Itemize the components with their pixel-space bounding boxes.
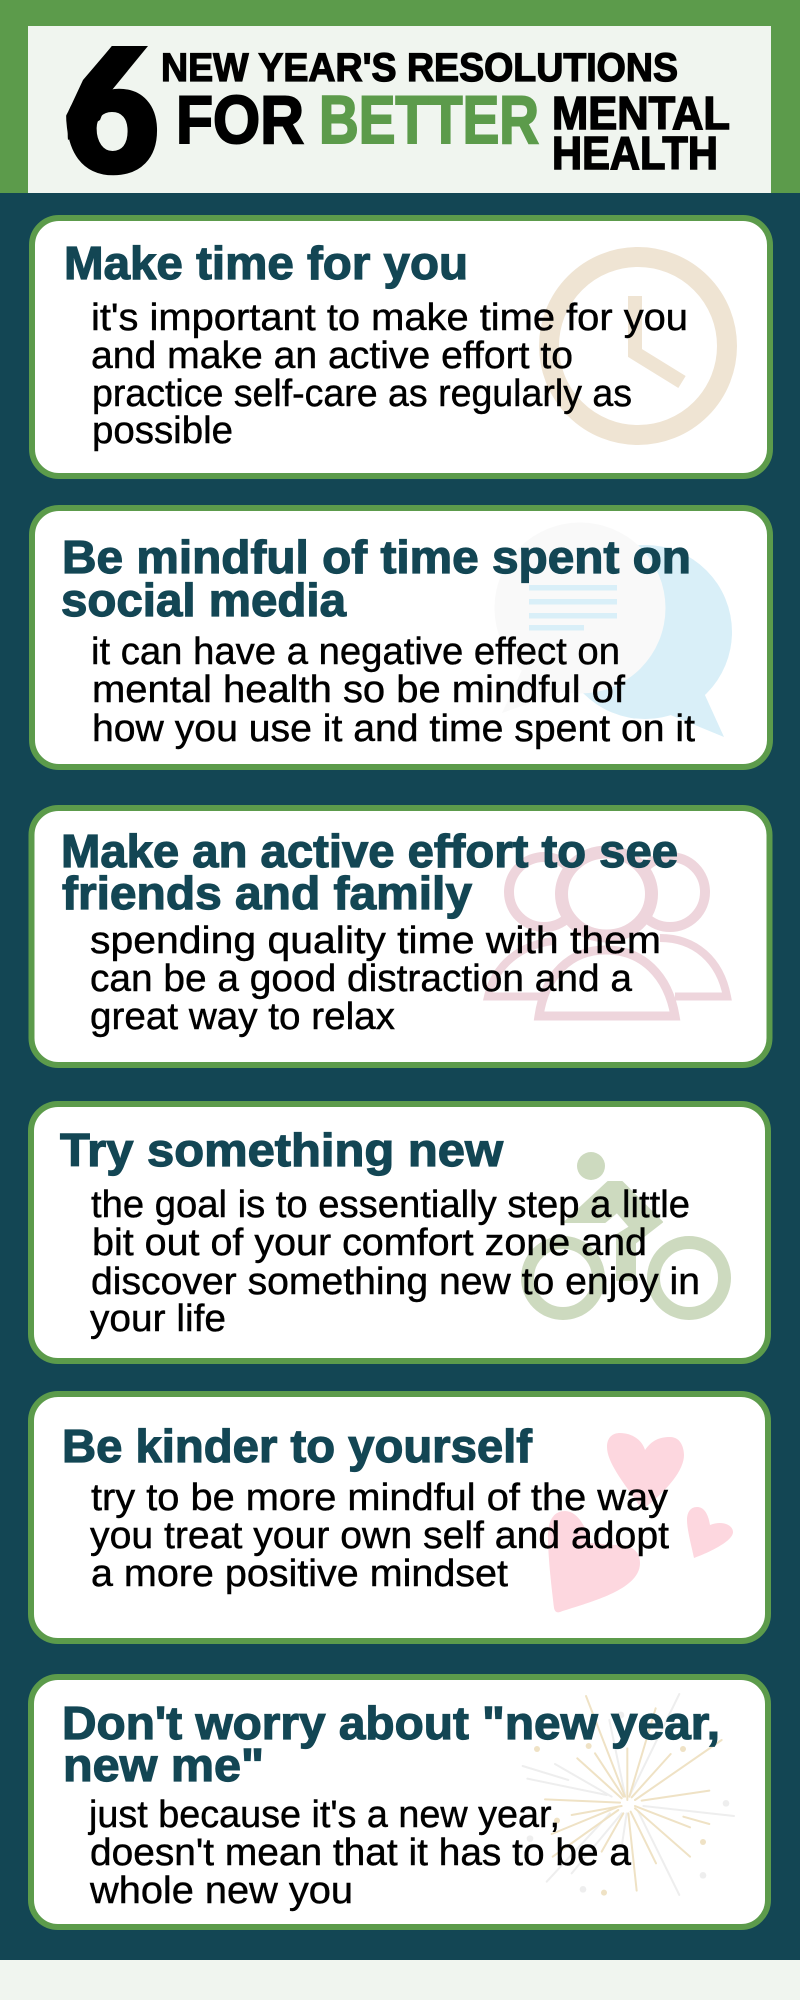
icon: hearts bbox=[548, 1433, 733, 1612]
body: new year new me: just because it's a new year, bbox=[88, 1794, 560, 1836]
body: new year new me: whole new you bbox=[89, 1870, 353, 1912]
body: social media: how you use it and time spent on it bbox=[92, 708, 695, 750]
title: new year's resolutions: NEW YEAR'S RESOLUTIONS bbox=[161, 46, 678, 90]
body: friends and family: spending quality time with them bbox=[90, 920, 661, 962]
title: mental: MENTAL bbox=[552, 87, 730, 139]
panel: try something new bbox=[31, 1104, 768, 1361]
body: be kinder to yourself: a more positive mindset bbox=[91, 1553, 508, 1595]
heading: social media: social media bbox=[61, 574, 346, 626]
body: try something new: your life bbox=[90, 1298, 226, 1340]
panel: be kinder to yourself bbox=[31, 1394, 768, 1641]
body: try something new: discover something new to enjoy in bbox=[91, 1261, 700, 1303]
body: make time for you bbox=[91, 297, 688, 452]
body: new year new me bbox=[88, 1794, 632, 1912]
body: make time for you: practice self-care as regularly as bbox=[92, 373, 632, 415]
icon: speech bubbles bbox=[494, 522, 732, 737]
panel: friends and family bbox=[32, 808, 770, 1065]
icon: people bbox=[488, 852, 727, 1016]
heading: new year new me bbox=[62, 1697, 720, 1791]
body: social media: it can have a negative effect on bbox=[91, 631, 620, 673]
heading: social media bbox=[61, 531, 691, 626]
body: friends and family: great way to relax bbox=[90, 996, 395, 1038]
body: social media bbox=[91, 631, 695, 750]
heading: friends and family: Make an active effort to see bbox=[61, 825, 678, 877]
body: make time for you: it's important to make time for you bbox=[91, 297, 688, 339]
title: big number 6: 6 bbox=[62, 9, 161, 210]
body: friends and family: can be a good distraction and a bbox=[90, 958, 633, 1000]
body: new year new me: doesn't mean that it has to be a bbox=[90, 1832, 632, 1874]
heading: new year new me: Don't worry about "new year, bbox=[62, 1697, 720, 1749]
heading: be kinder to yourself: Be kinder to yourself bbox=[62, 1420, 533, 1472]
title: big number 6 bbox=[66, 46, 158, 176]
heading: social media: Be mindful of time spent on bbox=[62, 531, 691, 583]
body: social media: mental health so be mindful of bbox=[92, 669, 625, 711]
body: try something new bbox=[90, 1184, 700, 1340]
panel: new year new me bbox=[31, 1677, 768, 1927]
body: be kinder to yourself bbox=[90, 1477, 669, 1595]
heading: make time for you: Make time for you bbox=[64, 237, 468, 289]
body: try something new: the goal is to essentially step a little bbox=[91, 1184, 690, 1226]
panel: social media bbox=[32, 508, 770, 767]
heading: friends and family bbox=[61, 825, 678, 919]
title: for: FOR bbox=[176, 82, 304, 158]
heading: friends and family: friends and family bbox=[62, 867, 472, 919]
heading: try something new: Try something new bbox=[60, 1124, 503, 1176]
body: make time for you: possible bbox=[92, 410, 233, 452]
body: be kinder to yourself: you treat your own self and adopt bbox=[90, 1515, 669, 1557]
panel: make time for you bbox=[32, 218, 770, 476]
body: be kinder to yourself: try to be more mindful of the way bbox=[91, 1477, 668, 1519]
body: make time for you: and make an active effort to bbox=[91, 335, 573, 377]
body: friends and family bbox=[90, 920, 661, 1038]
title: better: BETTER bbox=[319, 82, 539, 158]
body: try something new: bit out of your comfort zone and bbox=[92, 1222, 647, 1264]
heading: new year new me: new me" bbox=[63, 1739, 264, 1791]
icon: clock bbox=[549, 257, 727, 435]
header banner bbox=[0, 0, 800, 210]
icon: cyclist bbox=[528, 1152, 724, 1314]
title: health: HEALTH bbox=[552, 127, 718, 179]
icon: firework burst bbox=[523, 1694, 734, 1896]
